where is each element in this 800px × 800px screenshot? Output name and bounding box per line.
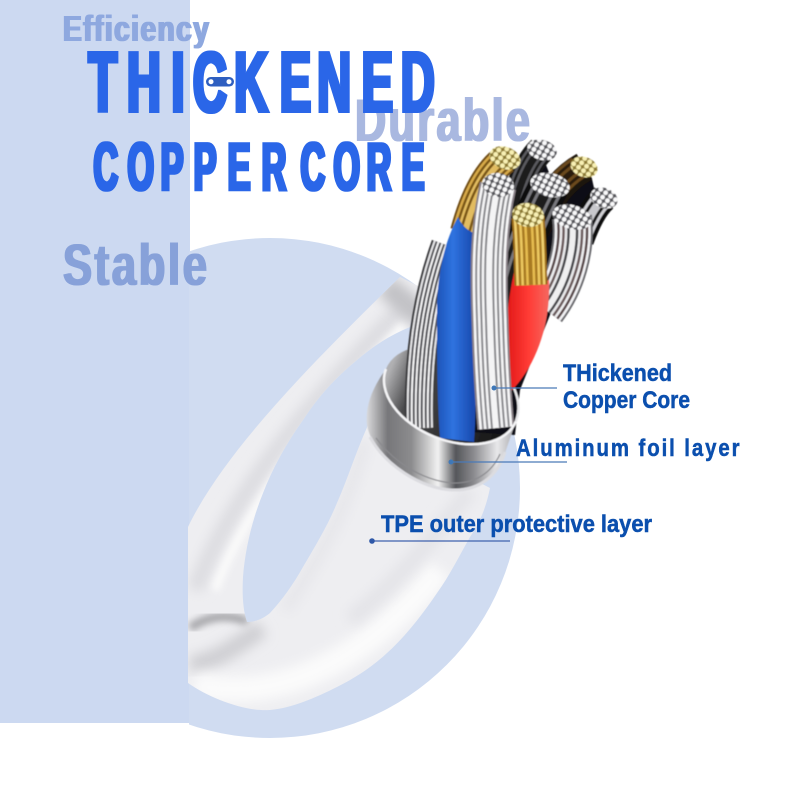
white cable loop: [188, 277, 490, 710]
icon: chain link on the title: [206, 77, 234, 86]
callout: thickened copper core: THickened: [563, 360, 672, 387]
back wires: black and brown strands: [498, 150, 604, 310]
background circle: [189, 238, 520, 738]
wire: blue insulation: [437, 217, 476, 442]
cable end with wires and metal ferrule: [367, 136, 621, 491]
wire: red insulation: [503, 272, 549, 398]
callout: thickened copper core: Copper Core: [563, 387, 690, 414]
metal ferrule: [367, 369, 518, 491]
wire: silver right strand: [546, 217, 573, 310]
title line: COPPER CORE: COPPER CORE: [94, 129, 424, 205]
wire: silver front strand: [489, 186, 498, 428]
wire: gold back-left strand: [465, 159, 505, 232]
wire: silver left strand: [420, 245, 446, 428]
callout: aluminum foil layer: Aluminum foil layer: [516, 434, 740, 461]
wire end caps: [480, 136, 621, 234]
watermark word: Efficiency: Efficiency: [63, 9, 209, 49]
watermark word: Stable: Stable: [63, 233, 207, 297]
watermark word: Durable: Durable: [355, 88, 530, 155]
callout: TPE outer protective layer: TPE outer protective layer: [381, 511, 652, 538]
left background panel: [0, 0, 190, 723]
ferrule interior: [369, 327, 533, 463]
wire: gold front strand: [528, 217, 531, 285]
dark core behind the wires: [440, 150, 600, 435]
title line: THICKENED: THICKENED: [88, 35, 435, 130]
callout: aluminum foil layer: [448, 434, 740, 464]
callout: thickened copper core: [492, 360, 690, 414]
